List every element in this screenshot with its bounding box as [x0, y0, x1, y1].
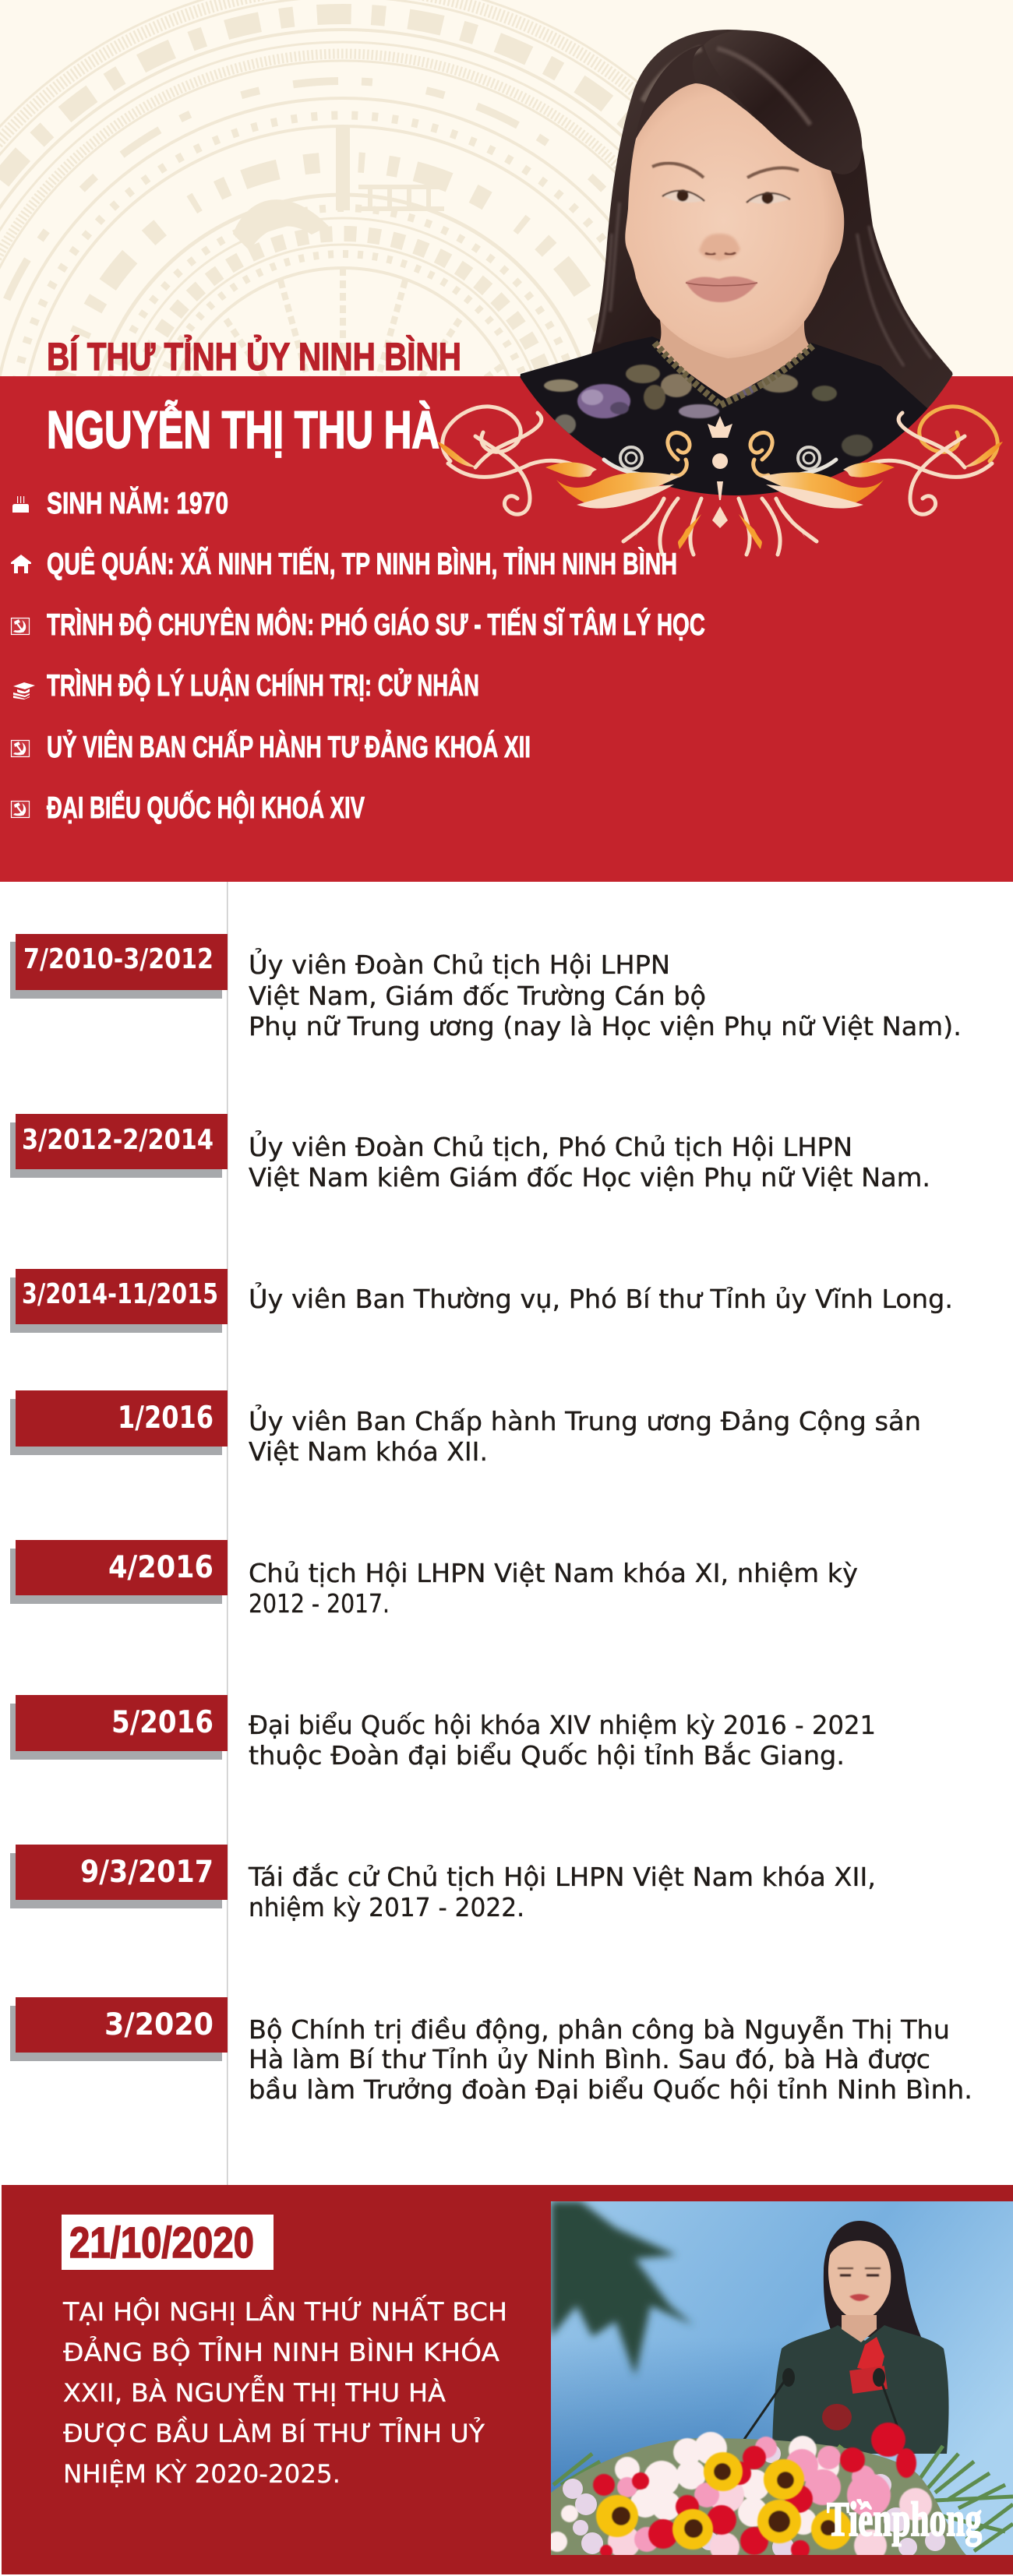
fact: birth year: SINH NĂM: 1970: [47, 486, 228, 520]
timeline entry 5/2016: [10, 1695, 876, 1771]
nose: [699, 234, 740, 261]
fact: birth year: [12, 486, 228, 520]
ornament left half: [437, 407, 701, 555]
timeline entry 3/2020: [10, 1997, 972, 2105]
flowers: sunflowers: [596, 2452, 852, 2550]
timeline entry 3/2020: 3/2020: [104, 2007, 214, 2042]
entry text: Việt Nam kiêm Giám đốc Học viện Phụ nữ Việt Nam.: [249, 1162, 930, 1193]
flowers: pink carnations: [617, 2437, 891, 2552]
date box: [16, 1695, 228, 1751]
flowers: pale roses: [547, 2432, 839, 2552]
entry text: Ủy viên Ban Thường vụ, Phó Bí thư Tỉnh ủy Vĩnh Long.: [249, 1281, 953, 1314]
timeline entry 3/2012-2/2014: [10, 1114, 930, 1193]
date box: [16, 1114, 228, 1169]
timeline entry 3/2014-11/2015: 3/2014-11/2015: [22, 1278, 218, 1310]
entry text: [249, 1558, 858, 1619]
fact: central committee: UỶ VIÊN BAN CHẤP HÀNH TƯ ĐẢNG KHOÁ XII: [47, 730, 531, 764]
flame leaf two: [545, 463, 597, 477]
large flame leaf: [556, 472, 679, 508]
header panel: [0, 0, 1013, 919]
entry text: bầu làm Trưởng đoàn Đại biểu Quốc hội tỉnh Ninh Bình.: [249, 2074, 972, 2105]
entry text: Đại biểu Quốc hội khóa XIV nhiệm kỳ 2016 - 2021: [249, 1710, 876, 1740]
date box: [16, 1390, 228, 1447]
flowers: light pink roses: [607, 2484, 933, 2555]
fact: professional qualification: TRÌNH ĐỘ CHUYÊN MÔN: PHÓ GIÁO SƯ - TIẾN SĨ TÂM LÝ HỌC: [47, 607, 705, 642]
entry text: Chủ tịch Hội LHPN Việt Nam khóa XI, nhiệm kỳ: [249, 1558, 858, 1588]
fact: hometown: QUÊ QUÁN: XÃ NINH TIẾN, TP NINH BÌNH, TỈNH NINH BÌNH: [47, 547, 677, 581]
palm leaves behind flowers: [553, 2446, 1013, 2551]
icon: house: [11, 555, 31, 573]
flowers: red carnations: [593, 2423, 916, 2559]
cream header background: [0, 0, 1013, 377]
red information band: [0, 376, 1013, 882]
microphones: [743, 2381, 898, 2439]
timeline vertical line: [227, 882, 228, 2185]
date box: [16, 934, 228, 990]
timeline entry 3/2014-11/2015: [10, 1269, 953, 1333]
dress: [521, 337, 927, 495]
ornament right half: [739, 407, 1003, 555]
date box: [16, 1997, 228, 2053]
fact: professional qualification: [11, 607, 705, 642]
speaker face: [828, 2240, 891, 2320]
date shadow: [10, 1549, 222, 1604]
photo sky background: [551, 2201, 1013, 2555]
hair back: [588, 30, 966, 436]
photo: speaker at podium with flowers: [547, 2201, 1013, 2562]
speaker facial features: [838, 2268, 881, 2301]
panel background: [2, 2185, 1013, 2574]
eyes: [662, 190, 790, 204]
icon: hammer and sickle: [11, 740, 30, 757]
timeline entry 7/2010-3/2012: [10, 934, 962, 1041]
entry text: Việt Nam khóa XII.: [249, 1436, 488, 1467]
neck: [656, 319, 809, 399]
entry text: [249, 1129, 930, 1193]
date box: [16, 1540, 228, 1595]
date label: 21/10/2020: [69, 2218, 254, 2267]
entry text: [249, 1710, 876, 1771]
bangs: [704, 30, 862, 174]
timeline entry 9/3/2017: [10, 1845, 876, 1922]
flower mass base: [551, 2438, 966, 2555]
panel text: TẠI HỘI NGHỊ LẦN THỨ NHẤT BCH: [62, 2295, 507, 2327]
panel text: NHIỆM KỲ 2020-2025.: [63, 2459, 341, 2489]
date shadow: [10, 1704, 222, 1760]
entry text: Ủy viên Đoàn Chủ tịch Hội LHPN: [249, 946, 670, 980]
date box: [16, 1269, 228, 1324]
decorative ornament: [437, 407, 1003, 555]
entry text: Ủy viên Đoàn Chủ tịch, Phó Chủ tịch Hội LHPN: [249, 1129, 852, 1162]
fact: political theory: TRÌNH ĐỘ LÝ LUẬN CHÍNH TRỊ: CỬ NHÂN: [47, 668, 479, 703]
microphone ball: [822, 2404, 852, 2430]
portrait of Nguyễn Thị Thu Hà: [521, 30, 953, 495]
date shadow: [10, 2006, 222, 2061]
date shadow: [10, 1122, 222, 1178]
entry text: Tái đắc cử Chủ tịch Hội LHPN Việt Nam khóa XII,: [248, 1862, 876, 1892]
fact: national assembly: [11, 790, 365, 825]
mouth: [686, 277, 757, 302]
flowers: orchid filler: [563, 2444, 945, 2558]
entry text: Phụ nữ Trung ương (nay là Học viện Phụ nữ Việt Nam).: [249, 1011, 962, 1041]
speaker dress: [772, 2325, 949, 2454]
hair strands: [598, 203, 931, 366]
speaker: [743, 2221, 949, 2454]
dress floral pattern: [544, 358, 873, 456]
date shadow: [10, 1399, 222, 1455]
blurred palm: [551, 2201, 694, 2376]
speaker hair: [824, 2221, 921, 2337]
fact: national assembly: ĐẠI BIỂU QUỐC HỘI KHOÁ XIV: [47, 790, 365, 825]
flame leaf one: [437, 442, 477, 467]
icon: graduation cap on books: [13, 682, 35, 700]
timeline entry 4/2016: [10, 1540, 858, 1619]
date box: [16, 1845, 228, 1900]
timeline entry 1/2016: [10, 1390, 921, 1467]
entry text: thuộc Đoàn đại biểu Quốc hội tỉnh Bắc Giang.: [249, 1740, 845, 1771]
entry text: [248, 1862, 876, 1922]
timeline entry 3/2012-2/2014: 3/2012-2/2014: [22, 1124, 214, 1156]
face: [625, 83, 844, 358]
date shadow: [10, 942, 222, 999]
bottom panel: 21/10/2020: [2, 2185, 1013, 2574]
date shadow: [10, 1277, 222, 1333]
icon: hammer and sickle: [11, 801, 30, 818]
fact: political theory: [13, 668, 479, 703]
panel text: XXII, BÀ NGUYỄN THỊ THU HÀ: [63, 2375, 446, 2408]
timeline entry 7/2010-3/2012: 7/2010-3/2012: [23, 943, 214, 975]
entry text: [249, 946, 962, 1041]
entry text: [249, 1403, 921, 1467]
fact: hometown: [11, 547, 677, 581]
icon: birthday cake: [12, 496, 29, 513]
fact: central committee: [11, 730, 531, 764]
timeline: [10, 882, 972, 2185]
red rosette and delegate badge: [857, 2337, 884, 2372]
icon: hammer and sickle: [11, 618, 30, 634]
entry text: Việt Nam, Giám đốc Trường Cán bộ: [249, 981, 706, 1011]
name: NGUYỄN THỊ THU HÀ: [47, 400, 439, 460]
panel text: ĐƯỢC BẦU LÀM BÍ THƯ TỈNH UỶ: [63, 2416, 485, 2448]
eyebrows: [652, 164, 799, 178]
entry text: Hà làm Bí thư Tỉnh ủy Ninh Bình. Sau đó, bà Hà được: [249, 2044, 930, 2074]
timeline entry 4/2016: 4/2016: [108, 1550, 214, 1585]
entry text: Ủy viên Ban Chấp hành Trung ương Đảng Cộng sản: [249, 1403, 921, 1436]
collar: [655, 343, 814, 405]
ornament centre: [708, 416, 732, 528]
entry text: Bộ Chính trị điều động, phân công bà Nguyễn Thị Thu: [249, 2014, 950, 2045]
panel text: [62, 2295, 507, 2489]
bronze drum emblem background: [0, 0, 637, 376]
timeline entry 5/2016: 5/2016: [111, 1705, 214, 1740]
entry text: [249, 2014, 972, 2105]
timeline entry 1/2016: 1/2016: [118, 1401, 214, 1436]
timeline entry 9/3/2017: 9/3/2017: [80, 1855, 214, 1890]
date shadow: [10, 1853, 222, 1908]
subtitle: BÍ THƯ TỈNH ỦY NINH BÌNH: [47, 334, 461, 379]
entry text: nhiệm kỳ 2017 - 2022.: [249, 1892, 524, 1922]
panel text: ĐẢNG BỘ TỈNH NINH BÌNH KHÓA: [63, 2335, 499, 2367]
entry text: 2012 - 2017.: [249, 1588, 390, 1619]
